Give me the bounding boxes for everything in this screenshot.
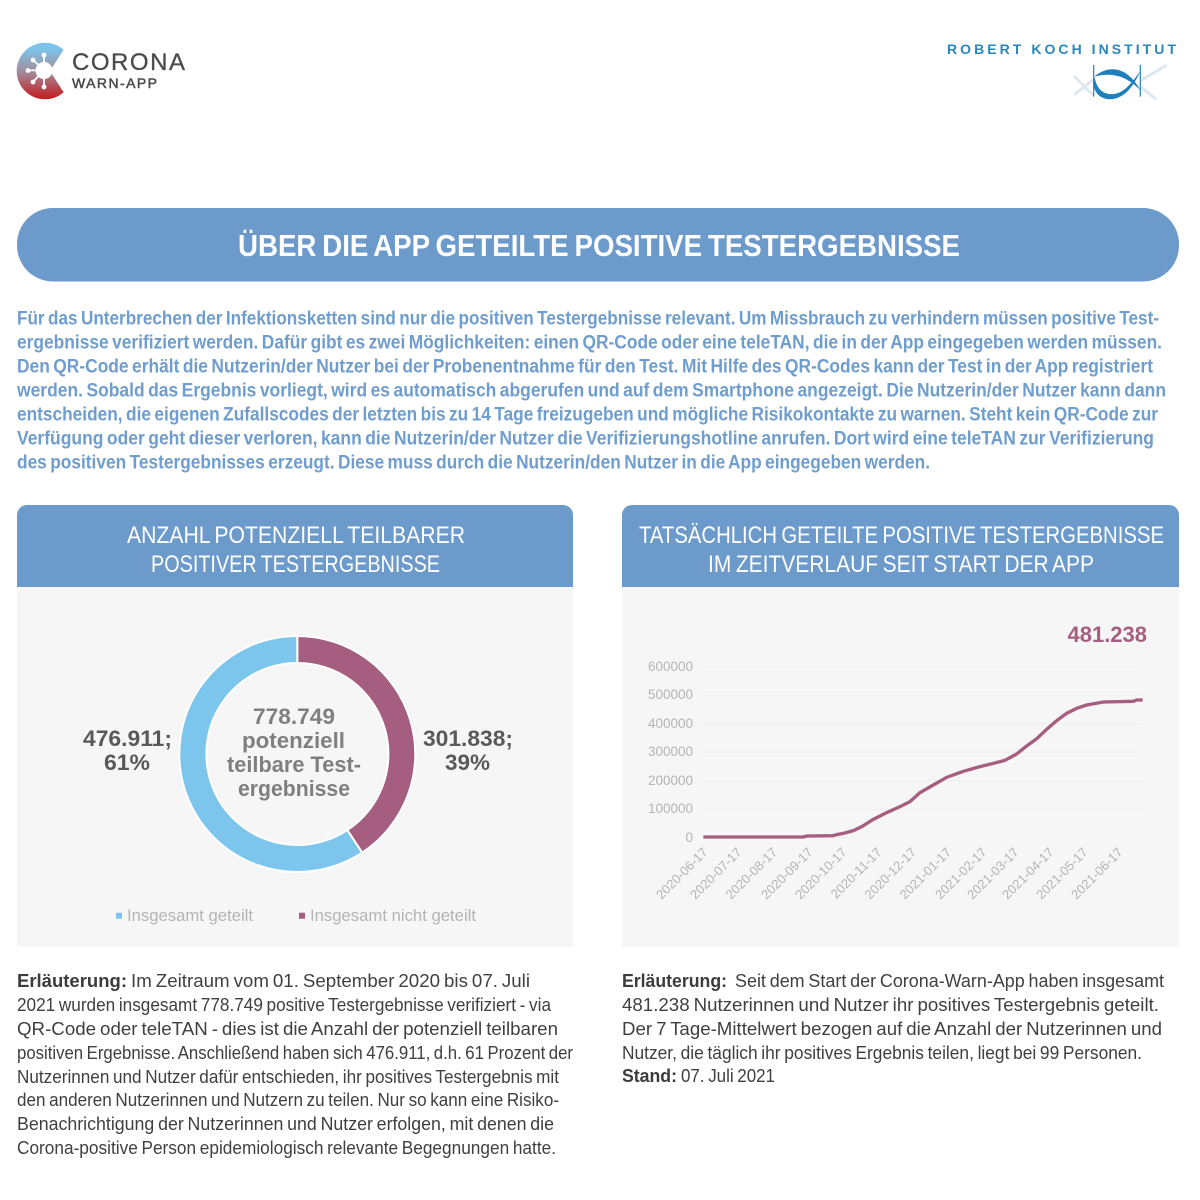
logo wordmark: CORONA (72, 49, 185, 76)
x axis labels: 2021-02-17 (932, 845, 990, 902)
x axis labels: 2020-11-17 (828, 845, 885, 901)
explanation text left: QR-Code oder teleTAN - dies ist die Anzahl der potenziell teilbaren (17, 1018, 558, 1039)
data label: nicht geteilt: 39% (445, 750, 490, 775)
x axis labels: 2020-10-17 (792, 845, 850, 902)
y axis labels: 300000 (648, 744, 693, 759)
explanation text left: Im Zeitraum vom 01. September 2020 bis 07. Juli (131, 970, 530, 991)
explanation text left: Benachrichtigung der Nutzerinnen und Nutzer erfolgen, mit denen die (17, 1113, 554, 1134)
x axis labels: 2020-06-17 (653, 845, 711, 902)
explanation text left: positiven Ergebnisse. Anschließend haben sich 476.911, d.h. 61 Prozent der (17, 1042, 573, 1063)
x axis labels: 2020-07-17 (687, 845, 745, 902)
data label: nicht geteilt (423, 726, 513, 775)
y axis labels: 200000 (648, 773, 693, 788)
data label: geteilt: 61% (104, 750, 150, 775)
y axis labels: 500000 (648, 687, 693, 702)
y axis labels: 400000 (648, 716, 693, 731)
donut chart (179, 636, 415, 872)
logo: Corona-Warn-App (17, 43, 185, 99)
panel: potenziell teilbare Testergebnisse (17, 505, 573, 947)
explanation text right: Stand: (622, 1065, 677, 1086)
panel: tatsächlich geteilte Testergebnisse (622, 505, 1179, 947)
donut centre label: potenziell (242, 728, 345, 753)
explanation text right (622, 970, 1164, 1086)
panel heading (622, 505, 1179, 587)
explanation text left (17, 970, 573, 1158)
y axis labels (648, 659, 693, 845)
donut centre label: 778.749 (253, 704, 335, 729)
data line (703, 700, 1143, 837)
legend: Insgesamt geteilt (127, 907, 253, 925)
line chart (648, 659, 1143, 902)
legend: Insgesamt nicht geteilt (310, 907, 476, 925)
icon: RKI helix (1074, 65, 1167, 99)
title banner (17, 208, 1179, 282)
logo wordmark (72, 49, 185, 91)
explanation text right: 481.238 Nutzerinnen und Nutzer ihr positives Testergebnis geteilt. (622, 994, 1159, 1015)
donut centre label (227, 704, 361, 801)
icon: virus ring (17, 43, 80, 99)
donut centre label: ergebnisse (238, 776, 350, 801)
explanation text right: Erläuterung: (622, 970, 727, 991)
panel heading: POSITIVER TESTERGEBNISSE (151, 551, 440, 578)
logo: Robert Koch Institut: ROBERT KOCH INSTITUT (947, 41, 1176, 57)
x axis labels: 2021-01-17 (896, 845, 954, 902)
data label: geteilt (83, 726, 172, 775)
explanation text left: 2021 wurden insgesamt 778.749 positive Testergebnisse verifiziert - via (17, 994, 552, 1015)
x axis labels: 2020-09-17 (758, 845, 816, 902)
logo wordmark: WARN-APP (72, 75, 157, 91)
intro text block: des positiven Testergebnisses erzeugt. Diese muss durch die Nutzerin/den Nutzer in die App eingegeben werden. (17, 452, 930, 474)
x axis labels: 2020-12-17 (861, 845, 919, 902)
explanation text left: Erläuterung: (17, 970, 127, 991)
explanation text right: Seit dem Start der Corona-Warn-App haben insgesamt (735, 970, 1164, 991)
explanation text right: Der 7 Tage-Mittelwert bezogen auf die Anzahl der Nutzerinnen und (622, 1018, 1162, 1039)
chart total value: 481.238 (1068, 622, 1147, 647)
x axis labels: 2021-05-17 (1033, 845, 1091, 902)
y axis labels: 600000 (648, 659, 693, 674)
intro text block (16, 308, 1166, 474)
x axis labels: 2021-03-17 (964, 845, 1022, 902)
explanation text left: Nutzerinnen und Nutzer dafür entschieden, ihr positives Testergebnis mit (17, 1066, 559, 1087)
x axis labels: 2021-06-17 (1068, 845, 1126, 902)
x axis labels: 2021-04-17 (999, 845, 1057, 902)
y axis labels: 0 (685, 830, 693, 845)
title banner: ÜBER DIE APP GETEILTE POSITIVE TESTERGEBNISSE (238, 228, 960, 263)
panel heading (17, 505, 573, 587)
x axis labels: 2020-08-17 (722, 845, 780, 902)
logo: Robert Koch Institut (947, 41, 1176, 99)
panel heading: IM ZEITVERLAUF SEIT START DER APP (708, 551, 1094, 578)
data label: geteilt: 476.911; (83, 726, 172, 751)
legend (116, 907, 476, 925)
explanation text left: den anderen Nutzerinnen und Nutzern zu teilen. Nur so kann eine Risiko- (17, 1089, 559, 1110)
explanation text right: Nutzer, die täglich ihr positives Ergebnis teilen, liegt bei 99 Personen. (622, 1042, 1142, 1063)
x axis labels (653, 845, 1126, 902)
donut centre label: teilbare Test- (227, 752, 361, 777)
panel heading: ANZAHL POTENZIELL TEILBARER (127, 522, 465, 549)
y axis labels: 100000 (648, 801, 693, 816)
explanation text right: 07. Juli 2021 (681, 1065, 775, 1086)
data label: nicht geteilt: 301.838; (423, 726, 513, 751)
explanation text left: Corona-positive Person epidemiologisch relevante Begegnungen hatte. (17, 1137, 556, 1158)
